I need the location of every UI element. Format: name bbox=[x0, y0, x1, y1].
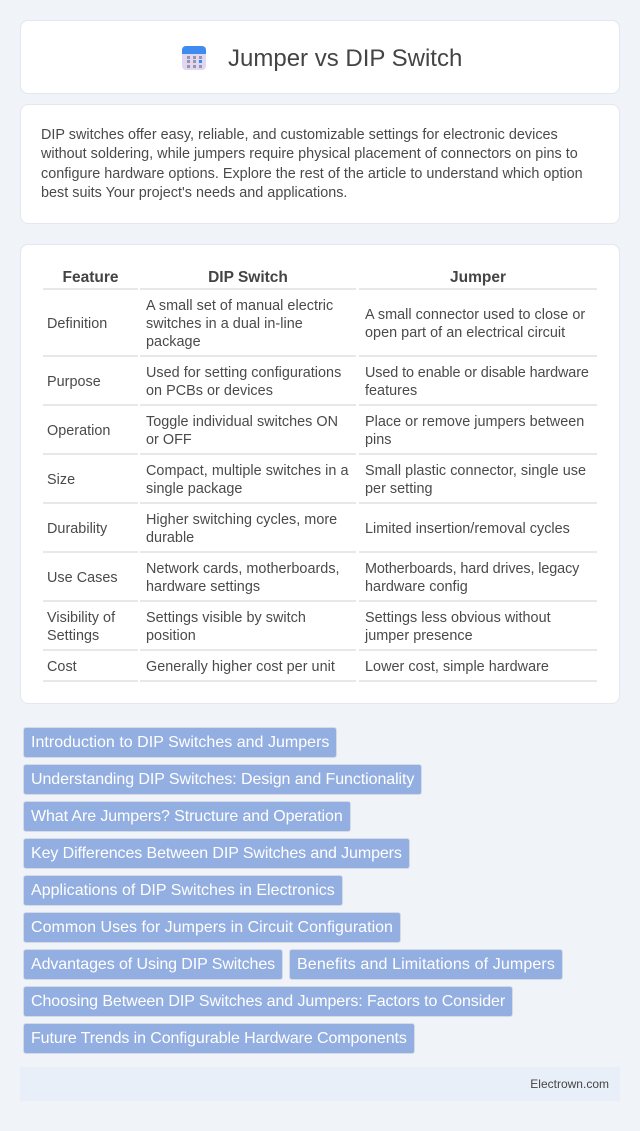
table rows: Network cards, motherboards, bbox=[146, 561, 340, 577]
table rows: Definition bbox=[47, 316, 107, 332]
table headers: Feature bbox=[62, 269, 118, 286]
table rows: Cost bbox=[47, 659, 77, 675]
table rows: Generally higher cost per unit bbox=[146, 659, 335, 675]
table rows: Settings bbox=[47, 628, 99, 644]
table rows: Settings visible by switch bbox=[146, 610, 306, 626]
tag 1: Introduction to DIP Switches and Jumpers bbox=[31, 734, 329, 751]
topic tags bbox=[23, 727, 563, 1054]
icon: calendar grid bbox=[182, 46, 206, 70]
intro card bbox=[20, 104, 620, 224]
intro text bbox=[41, 127, 583, 201]
table rows: durable bbox=[146, 530, 194, 546]
table rows: pins bbox=[365, 432, 392, 448]
intro text: without soldering, while jumpers require physical placement of connectors on pins to bbox=[41, 146, 578, 162]
tag 4 bbox=[23, 838, 410, 869]
tag 10: Future Trends in Configurable Hardware Components bbox=[31, 1030, 407, 1047]
tag 3 bbox=[23, 801, 351, 832]
table rows: Durability bbox=[47, 521, 107, 537]
tag 7 bbox=[23, 949, 283, 980]
table rows: on PCBs or devices bbox=[146, 383, 273, 399]
footer bbox=[20, 1067, 620, 1101]
intro text: DIP switches offer easy, reliable, and customizable settings for electronic devices bbox=[41, 127, 558, 143]
table rows: hardware settings bbox=[146, 579, 260, 595]
tag 8: Benefits and Limitations of Jumpers bbox=[297, 956, 555, 973]
table rows: Used for setting configurations bbox=[146, 365, 341, 381]
table rows: or OFF bbox=[146, 432, 192, 448]
tag 6: Common Uses for Jumpers in Circuit Configuration bbox=[31, 919, 393, 936]
tag 6 bbox=[23, 912, 401, 943]
intro text: configure hardware options. Explore the rest of the article to understand which option bbox=[41, 166, 583, 182]
tag 5: Applications of DIP Switches in Electronics bbox=[31, 882, 335, 899]
table rows: Toggle individual switches ON bbox=[146, 414, 338, 430]
table rows: Higher switching cycles, more bbox=[146, 512, 337, 528]
table rows: hardware config bbox=[365, 579, 468, 595]
comparison table card bbox=[20, 244, 620, 704]
table rows: Visibility of bbox=[47, 610, 115, 626]
table headers bbox=[62, 269, 506, 286]
table headers: Jumper bbox=[450, 269, 506, 286]
table rows: package bbox=[146, 334, 201, 350]
tag 10 bbox=[23, 1023, 415, 1054]
table rows: Compact, multiple switches in a bbox=[146, 463, 348, 479]
table rows: Motherboards, hard drives, legacy bbox=[365, 561, 579, 577]
table rows: per setting bbox=[365, 481, 433, 497]
table rows: Settings less obvious without bbox=[365, 610, 551, 626]
table rows: Small plastic connector, single use bbox=[365, 463, 586, 479]
tag 3: What Are Jumpers? Structure and Operation bbox=[31, 808, 343, 825]
table rows bbox=[43, 288, 597, 682]
tag 7: Advantages of Using DIP Switches bbox=[31, 956, 275, 973]
tag 2: Understanding DIP Switches: Design and Functionality bbox=[31, 771, 414, 788]
table rows: A small set of manual electric bbox=[146, 298, 333, 314]
table rows: single package bbox=[146, 481, 242, 497]
tag 2 bbox=[23, 764, 422, 795]
table rows: Place or remove jumpers between bbox=[365, 414, 584, 430]
tag 8 bbox=[289, 949, 563, 980]
table rows: features bbox=[365, 383, 417, 399]
footer source: Electrown.com bbox=[530, 1077, 609, 1091]
table rows: switches in a dual in-line bbox=[146, 316, 303, 332]
table rows: Size bbox=[47, 472, 75, 488]
table rows: Limited insertion/removal cycles bbox=[365, 521, 570, 537]
tag 1 bbox=[23, 727, 337, 758]
table rows: Operation bbox=[47, 423, 110, 439]
table rows: jumper presence bbox=[365, 628, 473, 644]
tag 9: Choosing Between DIP Switches and Jumpers: Factors to Consider bbox=[31, 993, 505, 1010]
tag 9 bbox=[23, 986, 513, 1017]
table rows: Lower cost, simple hardware bbox=[365, 659, 549, 675]
table rows: Use Cases bbox=[47, 570, 118, 586]
intro text: best suits Your project's needs and applications. bbox=[41, 185, 347, 201]
table rows: open part of an electrical circuit bbox=[365, 325, 565, 341]
table headers: DIP Switch bbox=[208, 269, 288, 286]
table rows: Purpose bbox=[47, 374, 101, 390]
title card bbox=[20, 20, 620, 94]
table rows: Used to enable or disable hardware bbox=[365, 365, 589, 381]
title: Jumper vs DIP Switch bbox=[228, 45, 462, 72]
table rows: A small connector used to close or bbox=[365, 307, 585, 323]
table rows: position bbox=[146, 628, 196, 644]
tag 5 bbox=[23, 875, 343, 906]
tag 4: Key Differences Between DIP Switches and Jumpers bbox=[31, 845, 402, 862]
